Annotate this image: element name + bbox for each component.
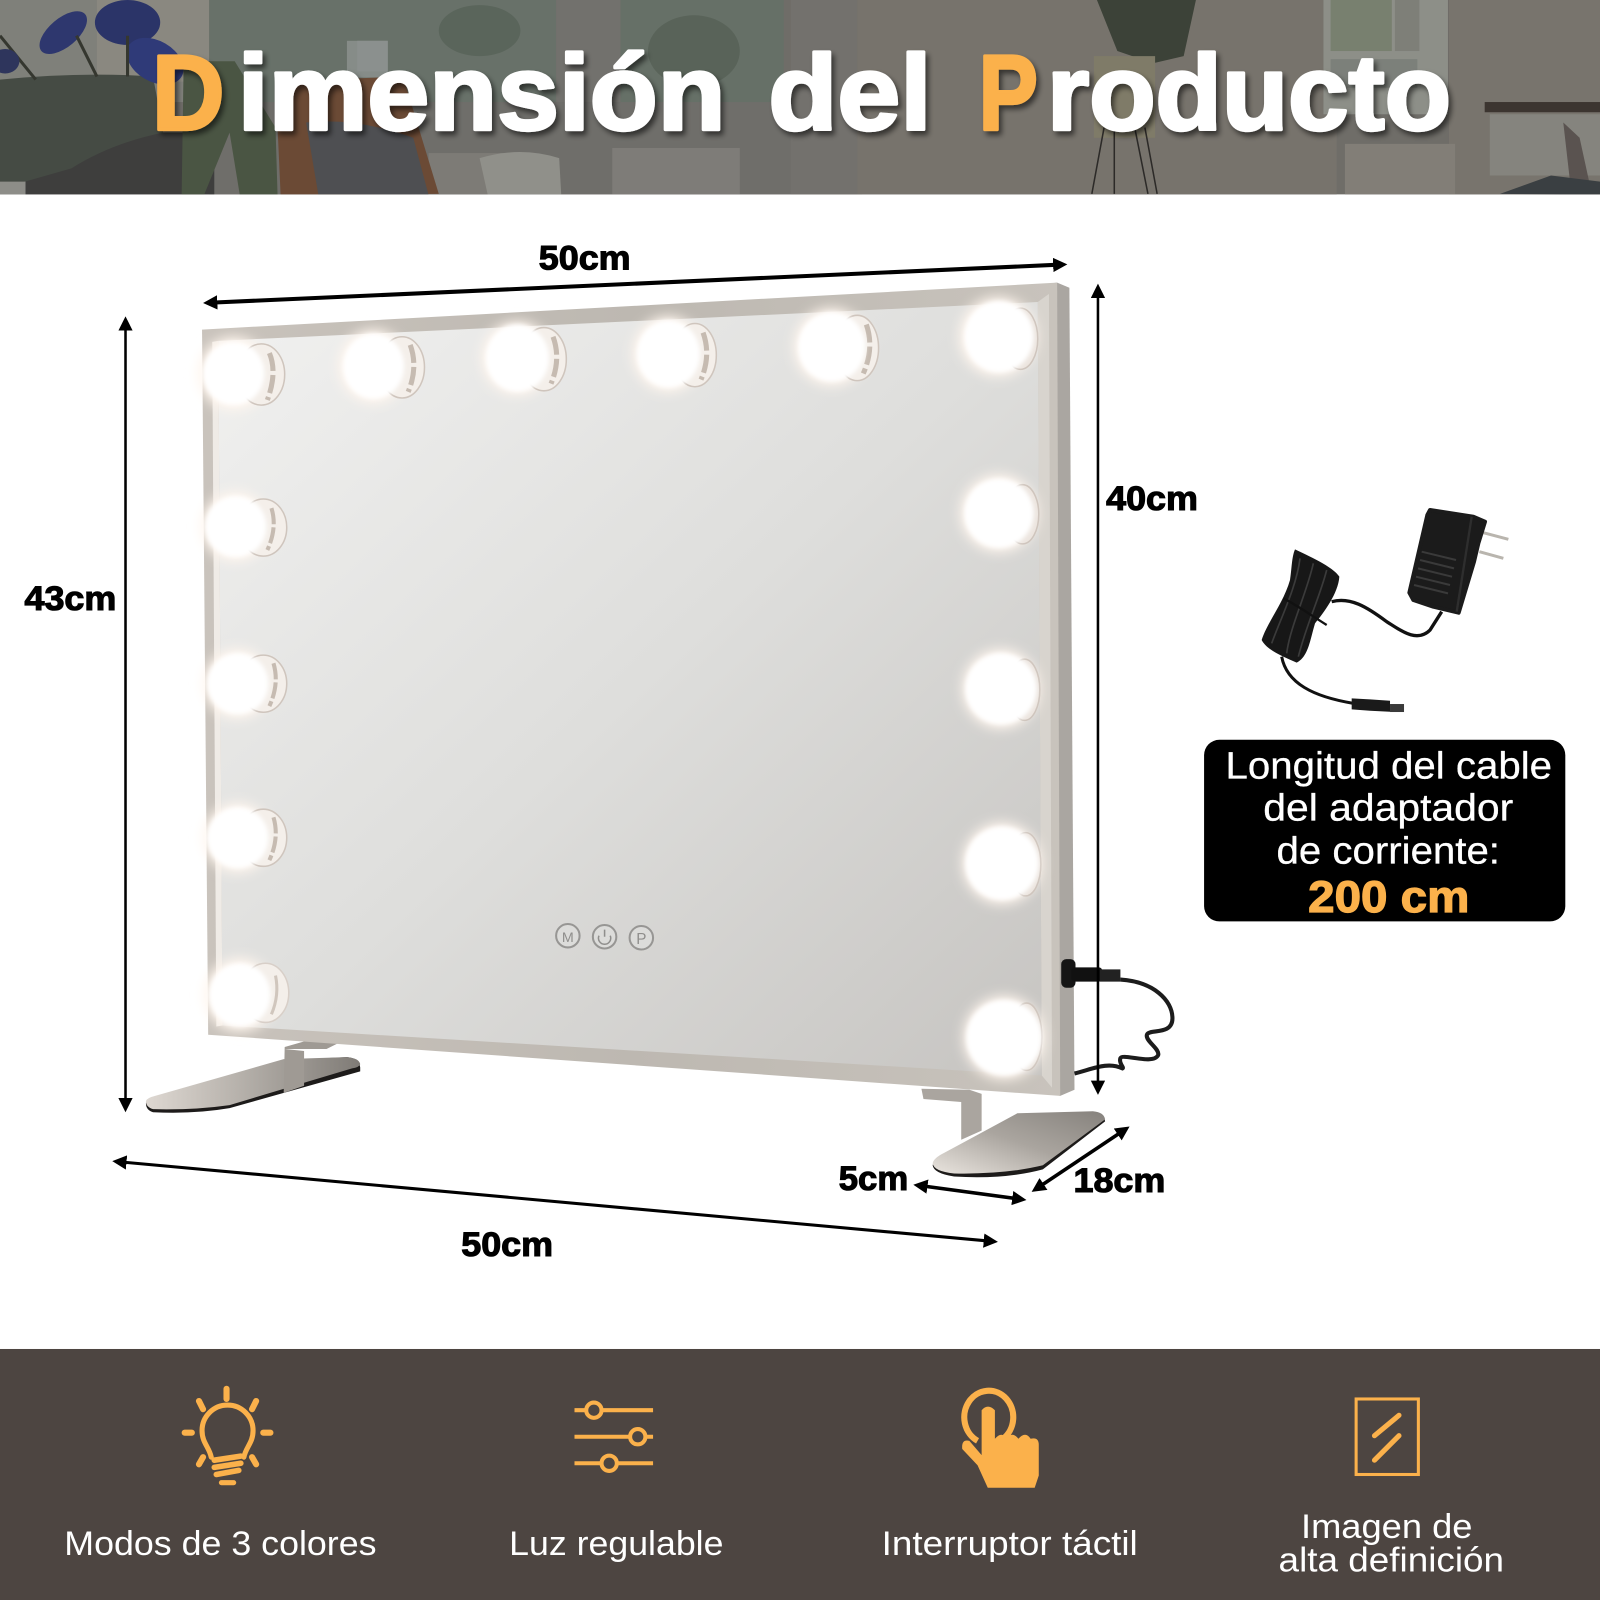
chair and pillow <box>276 77 439 195</box>
blue flowers <box>40 11 87 54</box>
touch buttons <box>556 924 653 949</box>
arrow: bottom width <box>118 1162 992 1241</box>
label: foot width 5cm: 5cm <box>839 1160 908 1198</box>
callout value: 200 cm <box>1308 871 1469 922</box>
bulb left 5 <box>204 958 289 1032</box>
title: del <box>768 33 932 153</box>
touch buttons: M <box>562 930 574 946</box>
cable tail and plug <box>1282 657 1353 703</box>
title: D <box>152 33 224 153</box>
label: 3 colour modes: Modos de 3 colores <box>64 1525 377 1563</box>
label: touch switch: Interruptor táctil <box>882 1525 1138 1563</box>
title: imensión <box>238 33 726 153</box>
label: high definition image: Imagen de <box>1301 1508 1472 1546</box>
title: P <box>979 33 1038 153</box>
bulb right 3 <box>962 649 1040 729</box>
callout text line 1: Longitud del cable <box>1226 745 1552 787</box>
bulb right 2 <box>960 474 1039 552</box>
arrow: left height <box>124 322 127 1106</box>
bulb top 5 <box>794 308 879 386</box>
adapter prongs <box>1479 533 1508 558</box>
callout text line 3: de corriente: <box>1277 829 1500 871</box>
frame side face <box>1049 283 1074 1096</box>
icon: light bulb <box>185 1389 270 1483</box>
back window <box>1323 0 1448 114</box>
bulb top 1 <box>198 337 285 410</box>
bulb left 4 <box>203 803 287 872</box>
cable <box>1332 600 1442 636</box>
bulb right 4 <box>962 822 1042 904</box>
label: high definition image: alta definición <box>1279 1541 1504 1579</box>
hanging vines <box>182 61 278 195</box>
bulb top 6 <box>959 297 1038 377</box>
label: bottom width 50cm: 50cm <box>461 1226 553 1264</box>
arrow: foot width <box>919 1186 1020 1199</box>
power adapter image <box>1262 510 1508 712</box>
mirror stand: left <box>146 1041 360 1113</box>
radiators <box>612 148 740 195</box>
label: dimmable light: Luz regulable <box>509 1525 723 1563</box>
header photo band <box>0 0 1600 195</box>
plant and stand <box>1097 0 1196 63</box>
icon: touch hand <box>962 1391 1039 1488</box>
bulb left 3 <box>203 649 287 718</box>
label: high definition image <box>1279 1508 1504 1579</box>
bulb right 5 <box>963 996 1045 1080</box>
label: right height 40cm: 40cm <box>1106 480 1198 518</box>
mirror stand: right <box>921 1089 1105 1177</box>
bulb top 4 <box>633 316 716 392</box>
touch buttons: P <box>636 931 646 948</box>
label: top width 50cm: 50cm <box>539 239 631 277</box>
bulb top 2 <box>339 330 424 403</box>
bulb left 2 <box>201 492 287 561</box>
icon: sliders <box>574 1403 653 1471</box>
feature band <box>0 1349 1600 1600</box>
callout: cable length <box>1204 740 1565 922</box>
mirror <box>198 283 1074 1096</box>
sofa and leaf <box>26 133 214 195</box>
power cable on mirror <box>1061 959 1172 1073</box>
adapter body <box>1409 510 1485 613</box>
title: roducto <box>1047 33 1451 153</box>
bulb top 3 <box>482 321 566 395</box>
label: foot depth 18cm: 18cm <box>1073 1162 1165 1200</box>
label: left height 43cm: 43cm <box>24 580 116 618</box>
arrow: top width <box>209 265 1061 303</box>
callout text line 2: del adaptador <box>1263 786 1513 828</box>
frame front <box>202 283 1060 1096</box>
mirror glass <box>218 302 1042 1076</box>
coiled cable <box>1262 549 1339 663</box>
icon: mirror <box>1356 1399 1418 1474</box>
arrow: foot depth <box>1037 1130 1124 1188</box>
arrow: right height <box>1097 290 1099 1089</box>
title <box>152 33 1451 153</box>
